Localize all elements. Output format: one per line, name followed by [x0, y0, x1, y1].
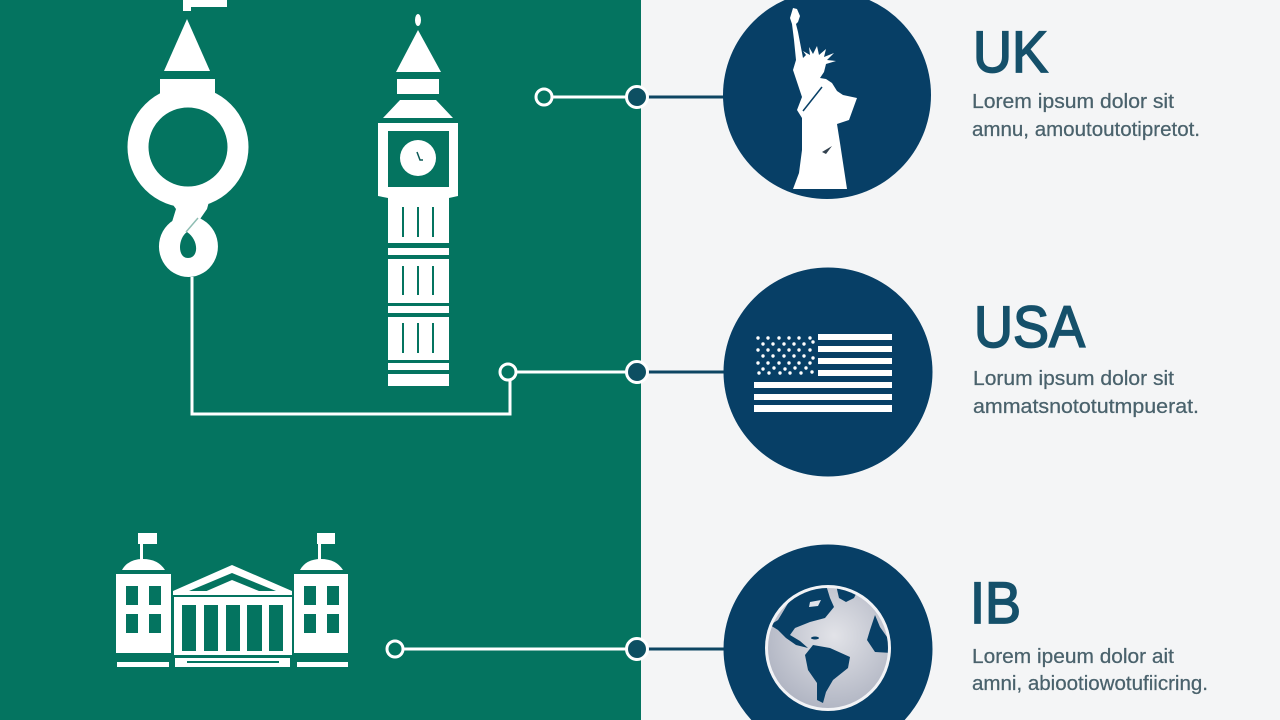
- heading: IB: IB: [970, 571, 1021, 636]
- text block: UK description: Lorem ipsum dolor sit: [972, 91, 1174, 113]
- panel: green left background: [0, 0, 641, 720]
- panel: light right background: [641, 0, 1280, 720]
- text block: USA description: Lorum ipsum dolor sit: [973, 368, 1174, 390]
- text block: IB description: amni, abiootiowotufiicring.: [972, 673, 1208, 695]
- connector: UK: [536, 86, 724, 108]
- icon: UK circle with statue: [723, 0, 931, 199]
- text block: USA description: ammatsnototutmpuerat.: [973, 396, 1199, 418]
- stars: [756, 336, 815, 375]
- connector: icon to USA node: [192, 277, 510, 414]
- connector: IB: [387, 638, 724, 660]
- connector: USA: [500, 362, 724, 382]
- icon: government building: [116, 533, 348, 667]
- icon: USA circle with flag: [724, 268, 932, 476]
- icon: IB circle with globe: [724, 544, 932, 720]
- text block: UK description: amnu, amoutoutotipretot.: [972, 119, 1200, 141]
- heading: UK: UK: [973, 20, 1048, 85]
- heading: USA: USA: [974, 295, 1085, 360]
- text block: IB description: Lorem ipeum dolor ait: [972, 646, 1174, 668]
- icon: clock tower: [378, 14, 458, 386]
- icon: ornamental ring tower: [138, 0, 238, 277]
